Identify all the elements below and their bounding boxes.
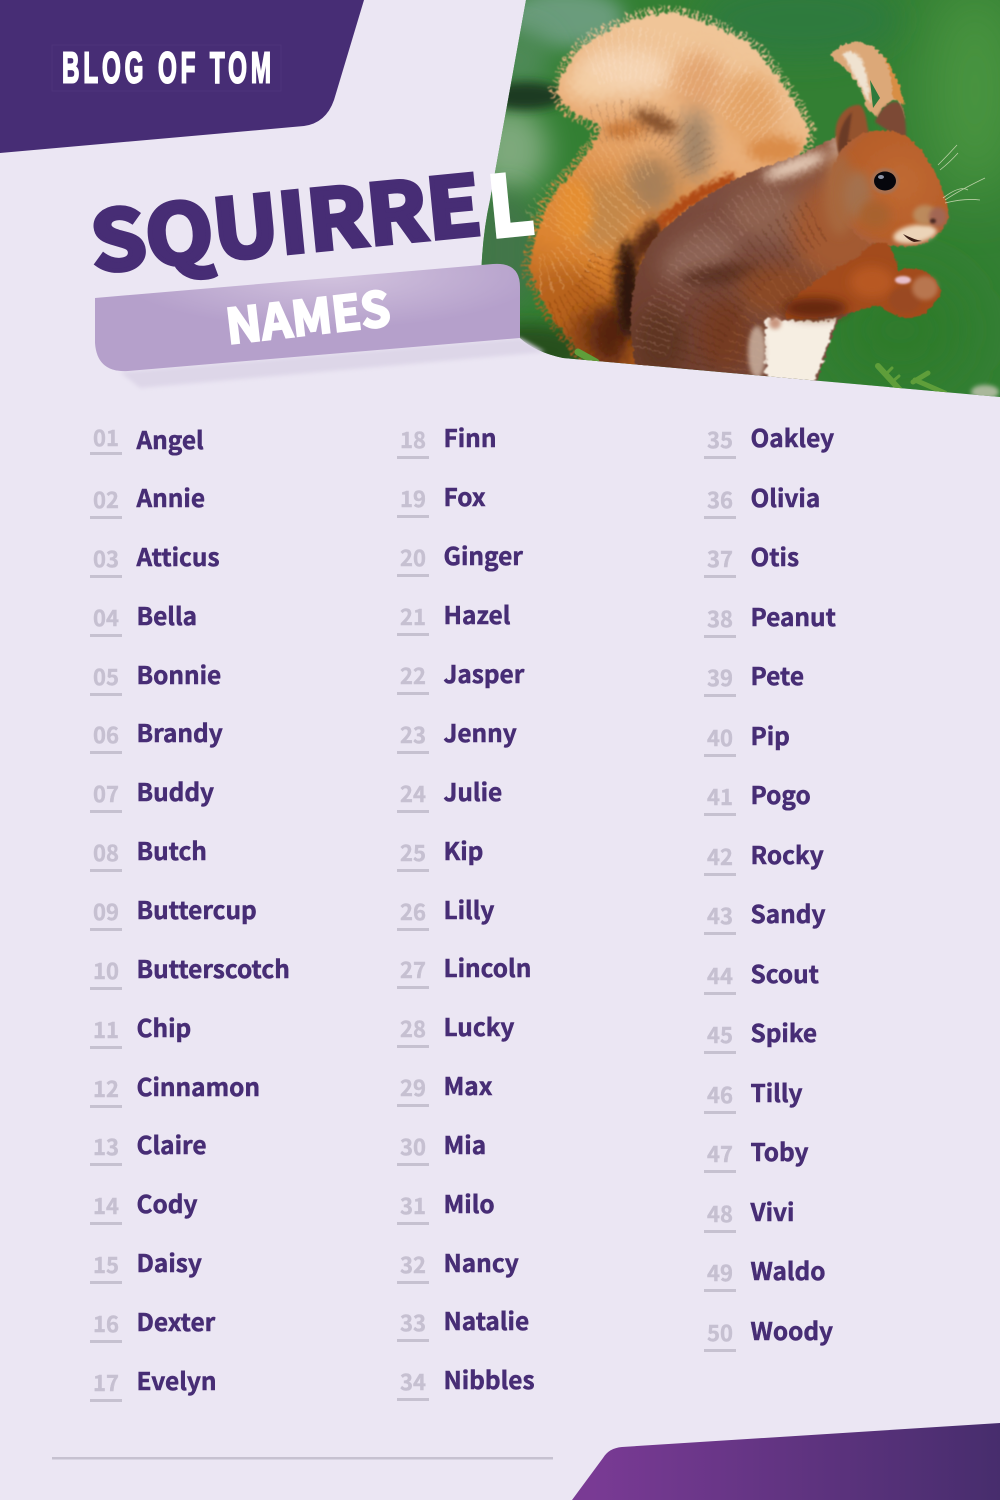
name 49 Waldo (704, 1254, 984, 1294)
name 28 Lucky: 28 (400, 1012, 426, 1044)
name 27 Lincoln (397, 950, 531, 989)
name 30 Mia: 30 (400, 1130, 426, 1162)
name 09 Buttercup: 09 (93, 895, 119, 927)
name 37 Otis (704, 539, 799, 578)
name 03 Atticus: Atticus (136, 539, 220, 574)
name 22 Jasper (397, 656, 525, 695)
name 47 Toby (704, 1135, 984, 1175)
body fur strands (650, 190, 830, 370)
name 22 Jasper: Jasper (444, 656, 524, 691)
name 03 Atticus (90, 539, 220, 578)
name 30 Mia (397, 1127, 486, 1166)
name 08 Butch: 08 (93, 836, 119, 868)
squirrel head (824, 130, 949, 247)
name 21 Hazel: Hazel (444, 597, 510, 632)
name 33 Natalie (397, 1303, 529, 1342)
name 50 Woody: Woody (750, 1313, 833, 1348)
name 20 Ginger (397, 538, 524, 577)
name 04 Bella (90, 598, 197, 637)
name 21 Hazel (397, 597, 510, 636)
name 38 Peanut: Peanut (750, 599, 836, 634)
name 18 Finn: 18 (400, 423, 426, 455)
subtitle ribbon: NAMES: NAMES (222, 270, 394, 358)
name 33 Natalie: Natalie (444, 1303, 529, 1338)
name 33 Natalie: 33 (400, 1306, 426, 1338)
name 09 Buttercup: Buttercup (136, 892, 257, 927)
name 02 Annie: 02 (93, 483, 119, 515)
name 47 Toby: Toby (750, 1134, 809, 1169)
tail and body junction shadow (638, 364, 646, 366)
name 50 Woody: 50 (707, 1316, 733, 1348)
name 20 Ginger: 20 (400, 541, 426, 573)
name 48 Vivi: Vivi (750, 1194, 794, 1229)
name 07 Buddy: 07 (93, 777, 119, 809)
name 10 Butterscotch (90, 951, 290, 990)
name 25 Kip (397, 833, 483, 872)
name 18 Finn: Finn (444, 420, 496, 455)
name 07 Buddy (90, 774, 214, 813)
name 31 Milo: Milo (444, 1186, 495, 1221)
name 04 Bella: Bella (136, 598, 197, 633)
name 43 Sandy (704, 897, 984, 937)
name 19 Fox: 19 (400, 482, 426, 514)
name 22 Jasper: 22 (400, 659, 426, 691)
name 09 Buttercup (90, 892, 257, 931)
name 45 Spike: 45 (707, 1018, 733, 1050)
subtitle ribbon shadow (120, 338, 545, 388)
name 46 Tilly: 46 (707, 1078, 733, 1110)
name 49 Waldo: Waldo (750, 1253, 826, 1288)
photo: red squirrel on green background (470, 0, 1000, 400)
name 14 Cody: Cody (136, 1186, 197, 1221)
squirrel whiskers (938, 145, 985, 203)
name 20 Ginger: Ginger (444, 538, 523, 573)
name 39 Pete: 39 (707, 661, 733, 693)
name 36 Olivia (704, 480, 820, 519)
name 15 Daisy: 15 (93, 1248, 119, 1280)
squirrel ears (834, 100, 907, 156)
name 41 Pogo (704, 778, 984, 818)
name 14 Cody (90, 1186, 198, 1225)
squirrel arm and paws (785, 242, 942, 319)
name 38 Peanut (704, 599, 836, 638)
name 07 Buddy: Buddy (136, 774, 214, 809)
name 43 Sandy: 43 (707, 899, 733, 931)
name 16 Dexter (90, 1304, 216, 1343)
name 45 Spike: Spike (750, 1015, 817, 1050)
subtitle ribbon: NAMES (95, 264, 520, 371)
title: SQUIRREL: SQUIRRE (85, 139, 485, 296)
name 06 Brandy: 06 (93, 718, 119, 750)
name 14 Cody: 14 (93, 1189, 119, 1221)
name 02 Annie (90, 480, 205, 519)
squirrel tail (520, 0, 820, 380)
name 17 Evelyn: 17 (93, 1366, 119, 1398)
name 29 Max: 29 (400, 1071, 426, 1103)
name 16 Dexter: Dexter (136, 1304, 215, 1339)
name 01 Angel: Angel (136, 422, 204, 457)
name 37 Otis: Otis (750, 539, 799, 574)
name 04 Bella: 04 (93, 601, 119, 633)
name 43 Sandy: Sandy (750, 896, 825, 931)
name 31 Milo: 31 (400, 1189, 426, 1221)
squirrel body (629, 136, 875, 381)
name 11 Chip: Chip (136, 1010, 191, 1045)
name 39 Pete: Pete (750, 658, 804, 693)
name 45 Spike (704, 1016, 984, 1056)
name 32 Nancy (397, 1245, 519, 1284)
name 38 Peanut: 38 (707, 602, 733, 634)
name 11 Chip: 11 (93, 1013, 119, 1045)
name 35 Oakley (704, 420, 834, 459)
foreground sprigs (578, 352, 945, 393)
name 24 Julie (397, 774, 502, 813)
name 35 Oakley: Oakley (750, 420, 834, 455)
name 12 Cinnamon: 12 (93, 1072, 119, 1104)
name 10 Butterscotch: Butterscotch (136, 951, 290, 986)
title: SQUIRREL: L (482, 138, 538, 261)
name 21 Hazel: 21 (400, 600, 426, 632)
name 06 Brandy (90, 715, 223, 754)
name 34 Nibbles: 34 (400, 1365, 426, 1397)
name 08 Butch: Butch (136, 833, 207, 868)
squirrel ear tufts (830, 42, 905, 120)
name 39 Pete (704, 658, 804, 697)
name 25 Kip: 25 (400, 836, 426, 868)
name 50 Woody (704, 1314, 984, 1354)
name 26 Lilly: Lilly (444, 892, 494, 927)
footer rule (52, 1457, 553, 1460)
name 40 Pip: 40 (707, 721, 733, 753)
name 15 Daisy (90, 1245, 202, 1284)
name 03 Atticus: 03 (93, 542, 119, 574)
logo: Blog of Tom: BLOG OF TOM (62, 43, 271, 92)
name 26 Lilly: 26 (400, 895, 426, 927)
name 01 Angel (90, 421, 204, 457)
name 11 Chip (90, 1010, 191, 1049)
name 30 Mia: Mia (444, 1127, 486, 1162)
tail fur strands (540, 54, 775, 320)
name 05 Bonnie: Bonnie (136, 657, 221, 692)
name 16 Dexter: 16 (93, 1307, 119, 1339)
name 34 Nibbles: Nibbles (444, 1362, 535, 1397)
name 41 Pogo: Pogo (750, 777, 811, 812)
name 19 Fox: Fox (444, 479, 486, 514)
footer corner shape (572, 1423, 1000, 1500)
name 05 Bonnie: 05 (93, 660, 119, 692)
name 17 Evelyn: Evelyn (136, 1363, 217, 1398)
name 18 Finn (397, 420, 496, 459)
name 34 Nibbles (397, 1362, 535, 1401)
name 24 Julie: 24 (400, 777, 426, 809)
name 37 Otis: 37 (707, 542, 733, 574)
name 42 Rocky (704, 838, 984, 878)
name 48 Vivi (704, 1195, 984, 1235)
name 17 Evelyn (90, 1363, 217, 1402)
name 31 Milo (397, 1186, 495, 1225)
name 28 Lucky: Lucky (444, 1009, 514, 1044)
name 26 Lilly (397, 892, 494, 931)
name 48 Vivi: 48 (707, 1197, 733, 1229)
name 25 Kip: Kip (444, 833, 483, 868)
name 24 Julie: Julie (444, 774, 502, 809)
name 10 Butterscotch: 10 (93, 954, 119, 986)
name 01 Angel: 01 (93, 421, 119, 453)
name 40 Pip (704, 718, 790, 757)
name 19 Fox (397, 479, 486, 518)
name 49 Waldo: 49 (707, 1256, 733, 1288)
name 46 Tilly (704, 1076, 984, 1116)
name 29 Max (397, 1068, 492, 1107)
name 40 Pip: Pip (750, 718, 790, 753)
name 15 Daisy: Daisy (136, 1245, 202, 1280)
name 06 Brandy: Brandy (136, 715, 223, 750)
name 05 Bonnie (90, 657, 221, 696)
name 02 Annie: Annie (136, 480, 205, 515)
name 28 Lucky (397, 1009, 514, 1048)
name 13 Claire (90, 1127, 207, 1166)
name 27 Lincoln: Lincoln (444, 950, 531, 985)
name 12 Cinnamon (90, 1069, 260, 1108)
name 41 Pogo: 41 (707, 780, 733, 812)
name 46 Tilly: Tilly (750, 1075, 803, 1110)
name 32 Nancy: 32 (400, 1248, 426, 1280)
name 29 Max: Max (444, 1068, 492, 1103)
name 12 Cinnamon: Cinnamon (136, 1069, 260, 1104)
name 44 Scout: 44 (707, 959, 733, 991)
name 35 Oakley: 35 (707, 423, 733, 455)
header banner (0, 0, 364, 153)
name 23 Jenny (397, 715, 517, 754)
name 36 Olivia: Olivia (750, 480, 820, 515)
name 47 Toby: 47 (707, 1137, 733, 1169)
name 44 Scout: Scout (750, 956, 819, 991)
name 42 Rocky: 42 (707, 840, 733, 872)
name 13 Claire: 13 (93, 1130, 119, 1162)
name 44 Scout (704, 957, 984, 997)
name 08 Butch (90, 833, 207, 872)
squirrel eye (871, 168, 899, 194)
name 13 Claire: Claire (136, 1127, 207, 1162)
name 32 Nancy: Nancy (444, 1245, 519, 1280)
name 23 Jenny: Jenny (444, 715, 517, 750)
squirrel belly (765, 318, 837, 385)
name 23 Jenny: 23 (400, 718, 426, 750)
name 27 Lincoln: 27 (400, 953, 426, 985)
name 36 Olivia: 36 (707, 483, 733, 515)
name 42 Rocky: Rocky (750, 837, 824, 872)
